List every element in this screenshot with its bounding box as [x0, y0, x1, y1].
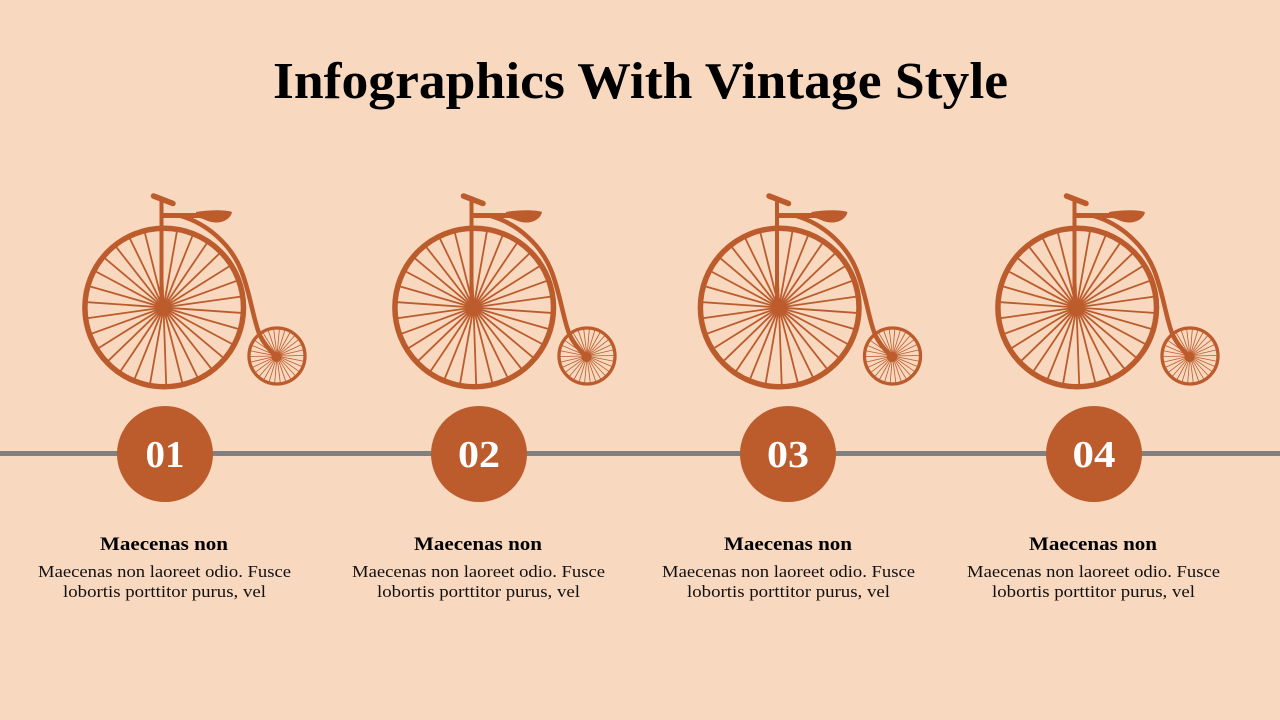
heading 4: Maecenas non [1029, 534, 1157, 555]
step 1 [38, 196, 306, 601]
step 2 [352, 196, 616, 601]
heading 1: Maecenas non [100, 534, 228, 555]
step 4 [967, 196, 1220, 601]
description 3: Maecenas non laoreet odio. Fusce [662, 562, 915, 581]
step 3 [662, 196, 922, 601]
icon: penny-farthing bicycle 4 [996, 196, 1219, 388]
heading 2: Maecenas non [414, 534, 542, 555]
heading 3: Maecenas non [724, 534, 852, 555]
description 3: lobortis porttitor purus, vel [687, 582, 890, 601]
description 1 [38, 562, 291, 601]
description 1: Maecenas non laoreet odio. Fusce [38, 562, 291, 581]
number badge 03 [740, 406, 836, 502]
description 4: lobortis porttitor purus, vel [992, 582, 1195, 601]
icon: penny-farthing bicycle 3 [699, 196, 922, 388]
description 4: Maecenas non laoreet odio. Fusce [967, 562, 1220, 581]
number badge 02 [431, 406, 527, 502]
number badge 04 [1046, 406, 1142, 502]
icon: penny-farthing bicycle 2 [393, 196, 616, 388]
number badge 01: 01 [146, 434, 184, 476]
number badge 02: 02 [458, 434, 500, 476]
number badge 04: 04 [1072, 434, 1116, 476]
number badge 03: 03 [767, 434, 809, 476]
title: Infographics With Vintage Style [273, 53, 1008, 110]
description 1: lobortis porttitor purus, vel [63, 582, 266, 601]
description 2 [352, 562, 605, 601]
timeline line [0, 451, 1280, 456]
description 4 [967, 562, 1220, 601]
description 2: lobortis porttitor purus, vel [377, 582, 580, 601]
number badge 01 [117, 406, 213, 502]
icon: penny-farthing bicycle 1 [83, 196, 306, 388]
description 3 [662, 562, 915, 601]
description 2: Maecenas non laoreet odio. Fusce [352, 562, 605, 581]
